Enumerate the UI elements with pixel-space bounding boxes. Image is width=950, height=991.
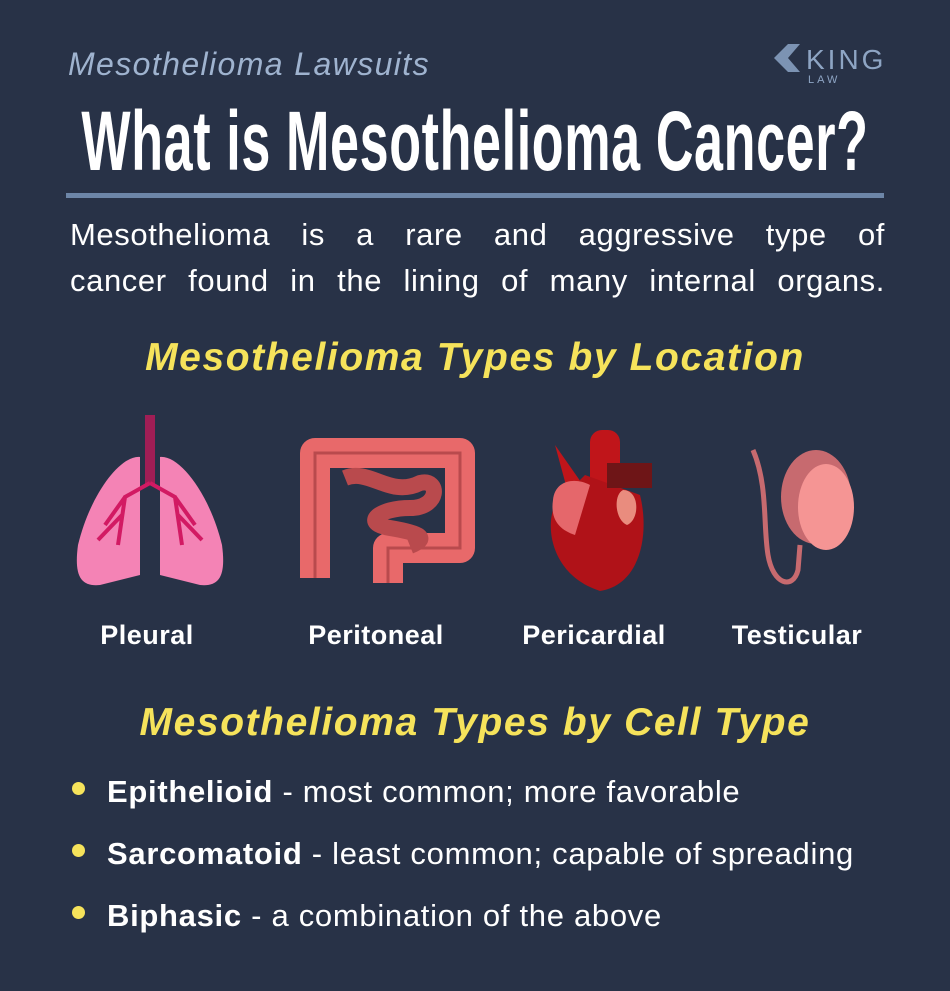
icon: intestines: [300, 438, 475, 583]
heading: types by location: Mesothelioma Types by Location: [145, 336, 805, 379]
label: pericardial: Pericardial: [522, 620, 666, 650]
icon: lungs: [76, 415, 224, 586]
bullet: biphasic: Biphasic - a combination of the above: [107, 898, 662, 933]
intro paragraph: [70, 217, 885, 298]
icon: testicle: [750, 449, 854, 584]
label: peritoneal: Peritoneal: [308, 620, 444, 650]
title: What is Mesothelioma Cancer?: [81, 94, 869, 188]
logo: KING: [806, 44, 886, 75]
logo: [774, 44, 886, 84]
intro paragraph: cancer found in the lining of many internal organs.: [70, 263, 885, 298]
icon: heart: [550, 430, 652, 591]
subtitle: Mesothelioma Lawsuits: [68, 46, 430, 82]
bullet: sarcomatoid: Sarcomatoid - least common; capable of spreading: [107, 836, 854, 871]
bullet: epithelioid: Epithelioid - most common; more favorable: [107, 774, 740, 809]
label: testicular: Testicular: [732, 620, 862, 650]
label: pleural: Pleural: [100, 620, 194, 650]
intro paragraph: Mesothelioma is a rare and aggressive type of: [70, 217, 885, 252]
heading: types by cell type: Mesothelioma Types by Cell Type: [140, 701, 810, 744]
